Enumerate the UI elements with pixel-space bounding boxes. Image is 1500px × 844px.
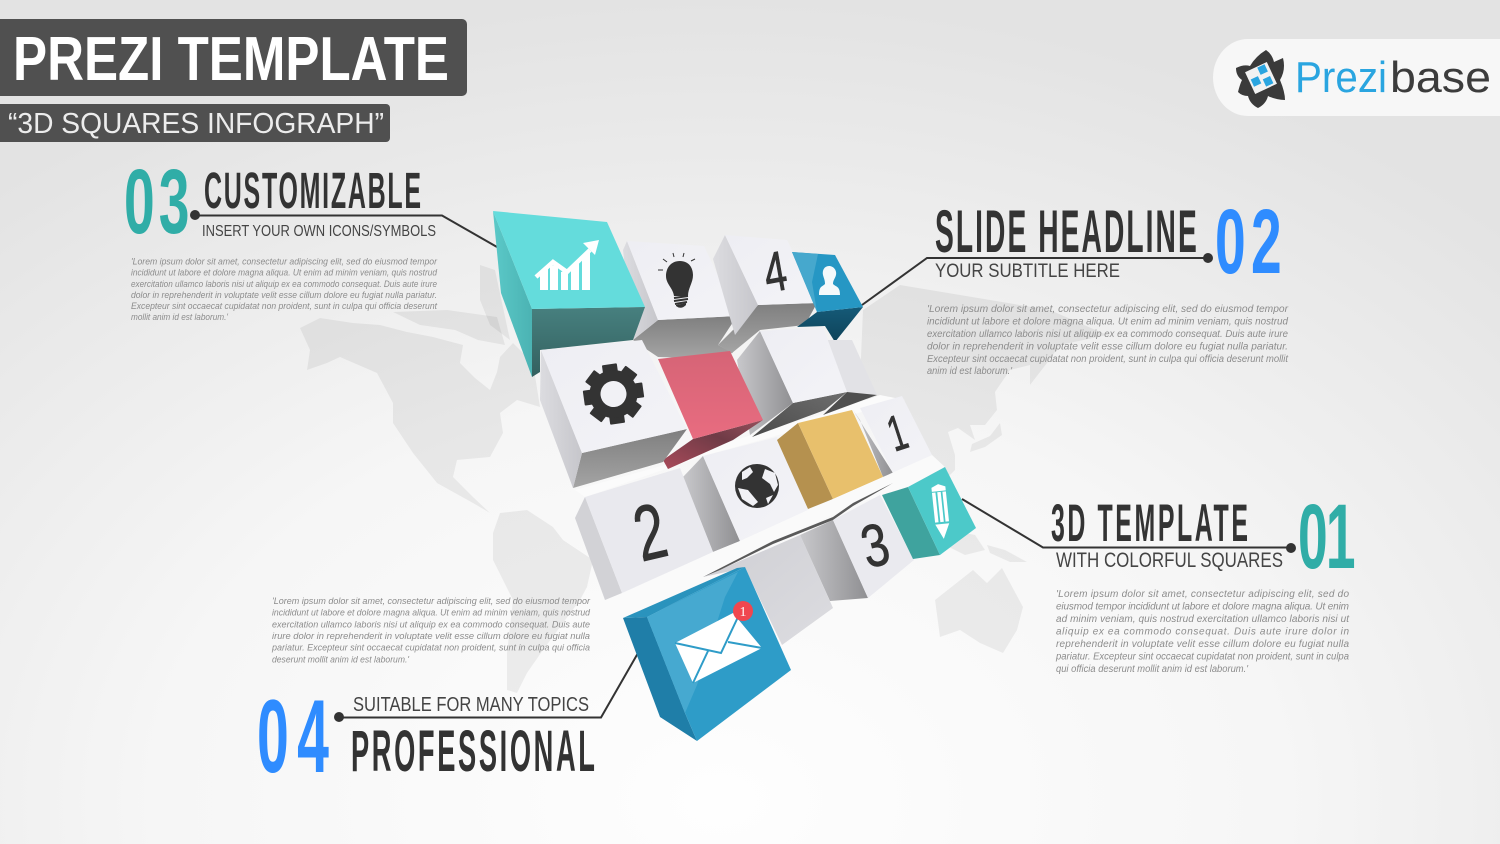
cube: blank white: [737, 327, 847, 437]
callout 02: slide headline: 02: [1215, 191, 1282, 294]
text block 03: Excepteur sint occaecat cupidatat non proident, sunt in culpa qui officia deserunt: [131, 301, 438, 311]
text block 04: pariatur. Excepteur sint occaecat cupidatat non proident, sunt in culpa qui officia: [271, 643, 590, 654]
callout 01: 3d template: WITH COLORFUL SQUARES: [1056, 549, 1283, 572]
callout 01: 3d template: 3D TEMPLATE: [1051, 494, 1248, 553]
text block 01: 'Lorem ipsum dolor sit amet, consectetur adipiscing elit, sed do: [1056, 589, 1349, 600]
cube: number 4: [713, 235, 817, 353]
map: new guinea: [987, 545, 1027, 562]
callout 02: slide headline: SLIDE HEADLINE: [935, 198, 1197, 265]
text block 01: reprehenderit in voluptate velit esse cillum dolore eu fugiat nulla: [1056, 639, 1349, 650]
gap highlights: [575, 395, 905, 497]
text block 02: Excepteur sint occaecat cupidatat non proident, sunt in culpa qui officia deserunt mollit: [927, 354, 1289, 365]
map: north america: [300, 318, 540, 513]
text block 02: [927, 304, 1289, 377]
icon: gear: [580, 360, 647, 428]
text block 03: dolor in reprehenderit in voluptate velit esse cillum dolore eu fugiat nulla pariatur.: [131, 290, 437, 300]
map: greenland: [480, 265, 510, 340]
subtitle banner: “3D SQUARES INFOGRAPH”: [8, 108, 384, 140]
callout 01: 3d template: 01: [1298, 485, 1356, 588]
cube: number 3: [800, 495, 914, 601]
cube: light bulb: [623, 241, 737, 358]
text block 02: exercitation ullamco laboris nisi ut aliquip ex ea commodo consequat. Duis aute irure: [927, 329, 1288, 340]
text block 01: eiusmod tempor incididunt ut labore et dolore magna aliqua. Ut enim: [1056, 602, 1349, 612]
white ribbon: [605, 455, 945, 605]
text block 04: [271, 596, 591, 665]
text block 03: mollit anim id est laborum.': [131, 312, 228, 322]
map: asia: [860, 285, 1107, 480]
text block 03: incididunt ut labore et dolore magna aliqua. Ut enim ad minim veniam, quis nostrud: [131, 268, 438, 278]
text block 04: exercitation ullamco laboris nisi ut aliquip ex ea commodo consequat. Duis aute: [272, 619, 590, 630]
map: arctic islands: [393, 310, 505, 345]
text block 01: aliquip ex ea commodo consequat. Duis aute irure dolor in: [1056, 626, 1349, 638]
text block 04: irure dolor in reprehenderit in voluptate velit esse cillum dolore eu fugiat nulla: [272, 631, 590, 642]
text block 04: deserunt mollit anim id est laborum.': [272, 654, 410, 665]
logo: prezibase: [1213, 39, 1500, 116]
badge: 1: [740, 605, 746, 620]
text block 04: 'Lorem ipsum dolor sit amet, consectetur adipiscing elit, sed do eiusmod tempor: [272, 596, 591, 607]
callout 02: slide headline: [862, 191, 1282, 305]
icon: growth chart: [536, 240, 599, 290]
text block 03: exercitation ullamco laboris nisi ut aliquip ex ea commodo consequat. Duis aute irure: [131, 279, 437, 289]
icon: bulb: [658, 253, 695, 308]
text block 01: pariatur. Excepteur sint occaecat cupidatat non proident, sunt in culpa: [1055, 652, 1349, 662]
icon: envelope: [675, 613, 762, 683]
callout 03: customizable: [124, 151, 497, 254]
text block 01: [1055, 589, 1350, 675]
text block 01: ad minim veniam, quis nostrud exercitation ullamco laboris nisi ut: [1056, 614, 1350, 625]
text block 02: anim id est laborum.': [927, 366, 1013, 377]
icon: prezibase star: [1236, 50, 1285, 108]
callout 04: professional: SUITABLE FOR MANY TOPICS: [353, 694, 589, 716]
cube: globe: [683, 437, 808, 552]
cube: red: [658, 351, 763, 469]
text block 04: incididunt ut labore et dolore magna aliqua. Ut enim ad minim veniam, quis nostrud: [272, 608, 591, 619]
cube: number 2: 2: [625, 486, 675, 578]
cube: blue user: [792, 252, 863, 342]
callout 01: 3d template: [962, 485, 1356, 588]
3d squares cluster: [493, 211, 976, 741]
cube: teal pencil: [882, 467, 976, 559]
callout 04: professional: 04: [257, 678, 329, 794]
cube: blank back: [823, 340, 877, 415]
callout 04: professional: PROFESSIONAL: [351, 719, 595, 784]
world map: [300, 265, 1107, 693]
callout 03: customizable: INSERT YOUR OWN ICONS/SYMBOLS: [202, 223, 436, 240]
text block 02: incididunt ut labore et dolore magna aliqua. Ut enim ad minim veniam, quis nostrud: [927, 316, 1288, 328]
text block 02: dolor in reprehenderit in voluptate velit esse cillum dolore eu fugiat nulla pariatur.: [927, 342, 1288, 352]
ribbon shadow: [703, 483, 893, 577]
callout 02: slide headline: YOUR SUBTITLE HERE: [935, 261, 1120, 282]
callout 04: professional: [257, 653, 638, 794]
map: south america: [493, 510, 593, 693]
icon: globe: [735, 464, 779, 508]
badge: [733, 601, 753, 621]
icon: pencil: [931, 483, 951, 540]
text block 03: 'Lorem ipsum dolor sit amet, consectetur adipiscing elit, sed do eiusmod tempor: [131, 256, 438, 266]
cube: number 4: 4: [759, 239, 791, 304]
logo: prezibase: base: [1390, 53, 1491, 102]
title banner: PREZI TEMPLATE: [13, 25, 449, 94]
cube: teal growth chart: [493, 211, 645, 377]
cube: gold: [777, 410, 883, 509]
logo: prezibase: Prezi: [1295, 53, 1387, 102]
map: indonesia: [945, 530, 985, 555]
map: japan: [970, 423, 1002, 452]
text block 01: qui officia deserunt mollit anim id est laborum.': [1056, 664, 1249, 675]
cube: blue mail: [623, 567, 791, 741]
text block 02: 'Lorem ipsum dolor sit amet, consectetur adipiscing elit, sed do eiusmod tempor: [927, 304, 1289, 315]
callout 03: customizable: CUSTOMIZABLE: [204, 162, 421, 219]
cube: blank lower: [703, 535, 833, 645]
callout 03: customizable: 03: [124, 151, 190, 254]
cube: number 1: [853, 396, 932, 477]
map: australia: [935, 568, 1023, 653]
text block 03: [131, 256, 438, 322]
cube: number 2: [575, 468, 713, 600]
cube: number 3: 3: [854, 510, 896, 581]
cube: number 1: 1: [881, 404, 914, 462]
cube: gear: [540, 340, 687, 488]
icon: user: [819, 266, 840, 295]
